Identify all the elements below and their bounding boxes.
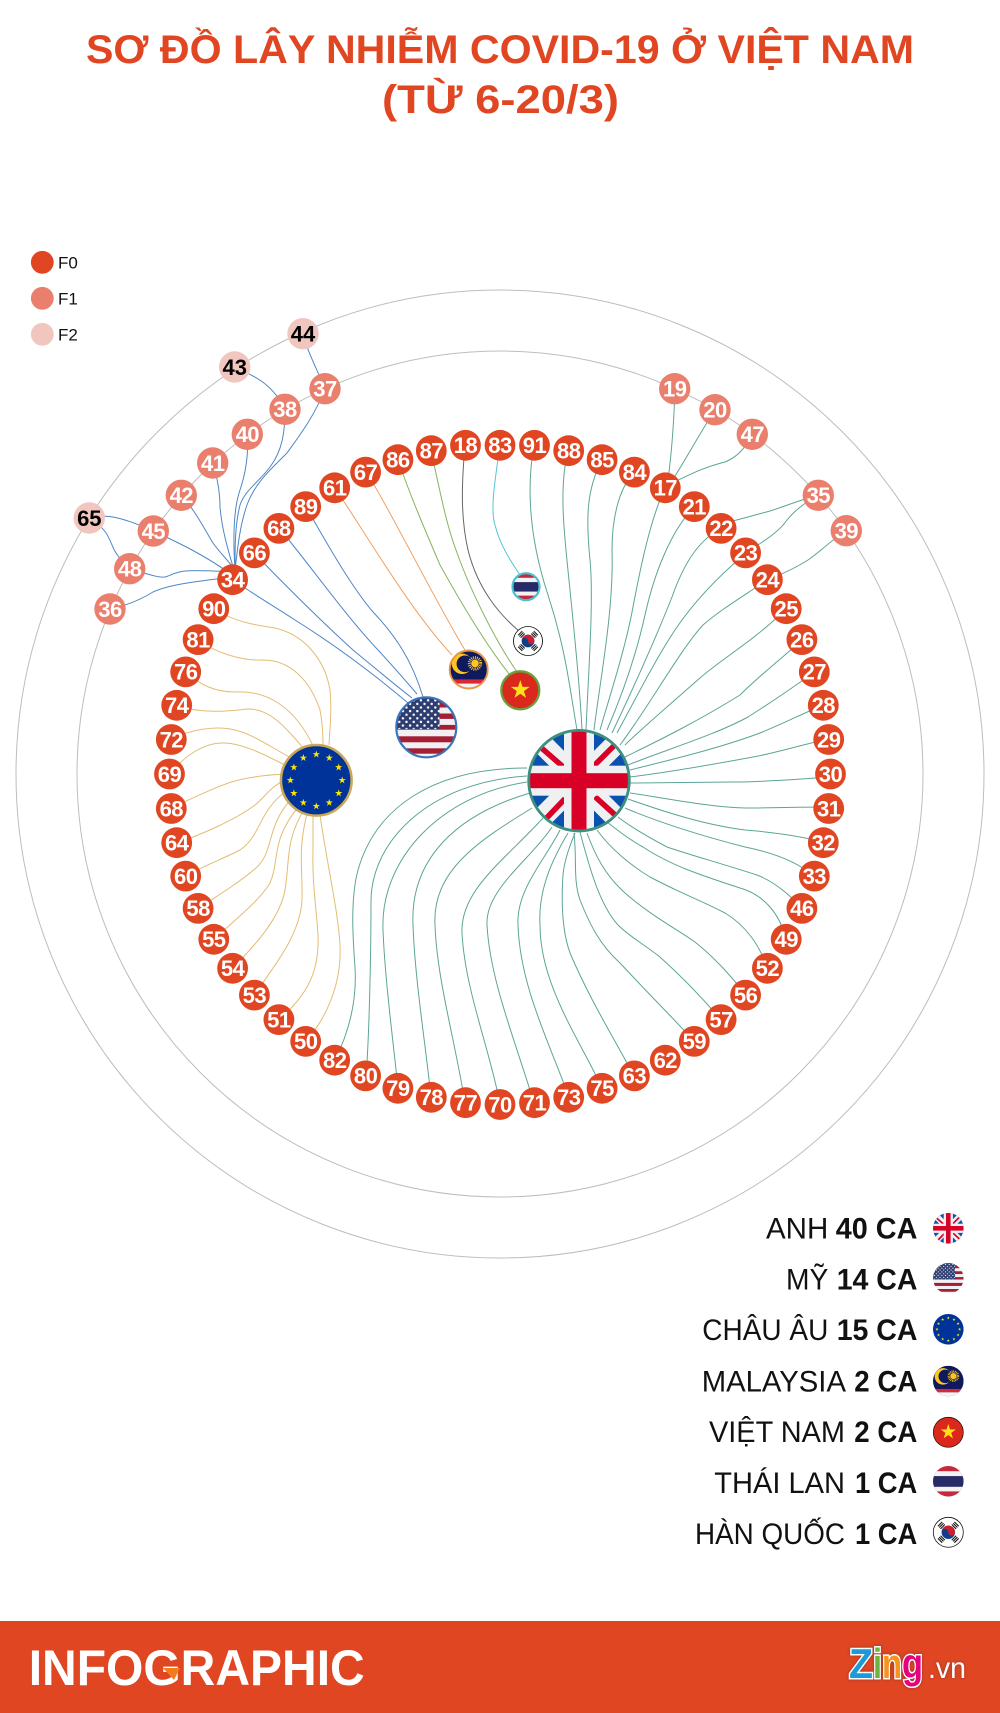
- node 80: 80: [354, 1064, 378, 1089]
- node 53: [239, 980, 270, 1010]
- node 58: [183, 893, 214, 924]
- node 84: 84: [623, 460, 647, 485]
- node 50: 50: [294, 1029, 318, 1054]
- node 83: [485, 430, 515, 461]
- node 83: 83: [488, 433, 512, 458]
- node 66: [239, 538, 270, 568]
- node 57: [706, 1004, 736, 1035]
- node 25: 25: [774, 597, 798, 622]
- node 87: [416, 435, 447, 466]
- node 41: [197, 447, 228, 479]
- node 44: [287, 318, 319, 349]
- node 88: [553, 435, 584, 466]
- node 68 (EU): 68: [160, 796, 183, 821]
- row: Mỹ: 14 CA: [837, 1263, 917, 1296]
- node 73: [553, 1082, 584, 1113]
- row: Việt Nam: [709, 1416, 964, 1449]
- node 63: 63: [623, 1064, 646, 1089]
- node 55: [198, 924, 229, 955]
- node 74: 74: [165, 693, 190, 718]
- hub flag: US: [396, 697, 456, 757]
- row: Anh: [766, 1212, 964, 1245]
- node 35: 35: [807, 483, 830, 508]
- node 88: 88: [557, 439, 581, 464]
- node 60: 60: [174, 864, 198, 889]
- node 18: [450, 430, 481, 461]
- hub flag: Vietnam: [501, 671, 539, 709]
- hub flag: UK: [529, 730, 629, 831]
- hub flag: Malaysia: [450, 650, 488, 688]
- node 45: 45: [142, 519, 165, 544]
- node 62: [650, 1045, 681, 1076]
- node 26: 26: [790, 627, 814, 652]
- links: UK: [335, 389, 846, 1104]
- node 43: [219, 351, 250, 383]
- node 32: 32: [812, 831, 835, 856]
- node 85: 85: [590, 448, 614, 473]
- node 34: 34: [221, 568, 246, 593]
- node 42: 42: [170, 483, 193, 508]
- node 39: 39: [835, 519, 858, 544]
- footer logo: Zing.vn: [849, 1640, 966, 1687]
- node 46: [786, 893, 817, 924]
- row: Châu Âu: CHÂU ÂU: [702, 1314, 828, 1347]
- footer logo: Zing.vn: n: [882, 1640, 902, 1687]
- node 76: [170, 656, 201, 687]
- node 17: 17: [654, 476, 677, 501]
- node 47: 47: [741, 422, 764, 447]
- node 19: [659, 373, 690, 404]
- node 69: [154, 759, 185, 789]
- node 31: 31: [817, 796, 841, 821]
- node 37: [309, 373, 341, 404]
- row: Hàn Quốc: HÀN QUỐC: [695, 1517, 845, 1551]
- row: Hàn Quốc: 1 CA: [855, 1518, 917, 1551]
- node 45: [138, 515, 169, 547]
- node 91: 91: [523, 433, 546, 458]
- node 49: [771, 924, 802, 955]
- hub flag: South Korea: [514, 626, 542, 656]
- node 67: 67: [354, 460, 378, 485]
- node 27: [799, 656, 830, 687]
- node 48: [114, 553, 145, 584]
- links: Vietnam: [398, 451, 517, 675]
- node 50: [290, 1026, 321, 1057]
- node 59: 59: [683, 1029, 706, 1054]
- node 79: 79: [386, 1076, 410, 1101]
- node 36: [94, 593, 126, 625]
- node 30: 30: [819, 762, 842, 787]
- node 20: [699, 394, 731, 425]
- node 39: [831, 515, 862, 546]
- node 44: 44: [291, 322, 316, 347]
- node 70: [485, 1089, 515, 1120]
- node 68 (US): 68: [267, 516, 291, 541]
- node 51: 51: [267, 1007, 291, 1032]
- title: (TỪ 6-20/3): [382, 76, 619, 122]
- node 46: 46: [790, 896, 814, 921]
- node 60: [170, 861, 201, 892]
- row: Anh: ANH: [766, 1212, 828, 1245]
- node 84: [619, 457, 650, 488]
- node 54: [217, 953, 248, 984]
- node 86: [382, 444, 413, 475]
- node 58: 58: [186, 896, 210, 921]
- row: Châu Âu: 15 CA: [837, 1314, 917, 1347]
- node 53: 53: [243, 983, 266, 1008]
- node 23: 23: [734, 541, 758, 566]
- node 57: 57: [709, 1007, 733, 1032]
- link: South Korea: [462, 445, 520, 632]
- footer logo: Zing.vn: .vn: [928, 1652, 966, 1685]
- node 69: 69: [158, 762, 181, 787]
- concentric guide rings: [16, 290, 984, 1258]
- node 24: [752, 564, 783, 595]
- node 22: 22: [709, 516, 733, 541]
- node 81: [183, 624, 214, 655]
- node 38: [269, 394, 301, 425]
- legend item F1: F1: [58, 290, 78, 308]
- node 87: 87: [420, 439, 443, 464]
- node 38: 38: [273, 397, 297, 422]
- country case counts legend: [695, 1212, 964, 1551]
- row: Malaysia: MALAYSIA: [702, 1366, 846, 1399]
- row: Malaysia: 2 CA: [854, 1366, 917, 1399]
- node 61: 61: [323, 476, 347, 501]
- node 29: [813, 724, 844, 755]
- node 80: [350, 1060, 381, 1091]
- node 42: [166, 480, 197, 511]
- legend item F2: F2: [58, 326, 78, 344]
- node 31: [813, 793, 844, 824]
- node 68 (EU): [156, 793, 187, 824]
- node 75: [587, 1073, 618, 1104]
- title: SƠ ĐỒ LÂY NHIỄM COVID-19 Ở VIỆT NAM: [86, 26, 914, 72]
- node 56: [730, 980, 761, 1010]
- node 47: [737, 419, 768, 450]
- node 59: [679, 1026, 710, 1057]
- node 64: [161, 827, 192, 858]
- node 18: 18: [454, 433, 477, 458]
- hub flag: EU: [281, 745, 352, 816]
- node 76: 76: [174, 660, 198, 685]
- footer band: [0, 1621, 1000, 1713]
- node 65: 65: [77, 506, 102, 531]
- node 52: 52: [756, 956, 779, 981]
- node 26: [786, 624, 817, 655]
- node 23: [730, 538, 761, 568]
- footer logo: Zing.vn: g: [902, 1640, 923, 1687]
- row: Mỹ: [786, 1262, 964, 1296]
- F1 case ring: [94, 373, 862, 625]
- legend: case generations: [31, 251, 78, 346]
- node 19: 19: [663, 377, 687, 402]
- node 61: [319, 472, 350, 503]
- links: Malaysia: [335, 472, 465, 655]
- node 41: 41: [201, 451, 225, 476]
- node 81: 81: [186, 627, 210, 652]
- row: Thái Lan: THÁI LAN: [714, 1467, 845, 1500]
- node 82: 82: [323, 1048, 347, 1073]
- links: US: [89, 334, 423, 703]
- node 56: 56: [734, 983, 758, 1008]
- node 63: [619, 1060, 650, 1091]
- node 74: [161, 690, 192, 721]
- node 33: [799, 861, 830, 892]
- node 30: [815, 759, 846, 789]
- node 33: 33: [803, 864, 826, 889]
- legend item F0: F0: [58, 254, 78, 272]
- node 91: [519, 430, 550, 461]
- node 82: [319, 1045, 350, 1076]
- node 34: [217, 564, 248, 595]
- node 77: [450, 1087, 481, 1118]
- node 89: 89: [294, 494, 318, 519]
- node 71: 71: [523, 1090, 546, 1115]
- node 21: 21: [683, 494, 706, 519]
- node 78: 78: [420, 1085, 443, 1110]
- node 28: [808, 690, 839, 721]
- node 54: 54: [221, 956, 246, 981]
- node 43: 43: [222, 355, 247, 380]
- node 22: [706, 513, 736, 544]
- node 40: [232, 419, 263, 450]
- node 29: 29: [817, 727, 841, 752]
- node 25: [771, 593, 802, 624]
- node 55: 55: [202, 927, 226, 952]
- row: Malaysia: [702, 1366, 964, 1399]
- footer brand: INFOGRAPHIC: INFOGRAPHIC: [29, 1640, 365, 1696]
- row: Anh: 40 CA: [836, 1212, 917, 1245]
- F2 case ring: [74, 318, 319, 534]
- node 79: [382, 1073, 413, 1104]
- link: Thailand: [493, 445, 520, 575]
- node 70: 70: [488, 1092, 512, 1117]
- node 66: 66: [243, 541, 266, 566]
- hub flag: Thailand: [512, 573, 540, 600]
- node 28: 28: [812, 693, 835, 718]
- title: [86, 26, 914, 122]
- row: Thái Lan: 1 CA: [855, 1467, 917, 1500]
- row: Việt Nam: 2 CA: [854, 1416, 917, 1449]
- node 64: 64: [165, 831, 190, 856]
- node 67: [350, 457, 381, 488]
- F0 case ring: [154, 430, 846, 1120]
- node 32: [808, 827, 839, 858]
- row: Hàn Quốc: [695, 1517, 964, 1551]
- node 37: 37: [313, 377, 337, 402]
- node 65: [74, 502, 105, 534]
- footer logo: Zing.vn: i: [873, 1640, 882, 1687]
- node 48: 48: [118, 557, 142, 582]
- node 72: [156, 724, 187, 755]
- row: Việt Nam: VIỆT NAM: [709, 1416, 845, 1449]
- node 52: [752, 953, 783, 984]
- node 40: 40: [236, 422, 259, 447]
- node 68 (US): [264, 513, 294, 544]
- node 24: 24: [756, 568, 780, 593]
- node 21: [679, 491, 710, 522]
- node 90: [198, 593, 229, 624]
- node 49: 49: [774, 927, 798, 952]
- row: Châu Âu: [702, 1314, 964, 1347]
- node 89: [290, 491, 321, 522]
- node 71: [519, 1087, 550, 1118]
- node 27: 27: [803, 660, 826, 685]
- node 72: 72: [160, 727, 183, 752]
- node 78: [416, 1082, 447, 1113]
- node 90: 90: [202, 597, 226, 622]
- node 62: 62: [654, 1048, 677, 1073]
- footer logo: Zing.vn: Z: [849, 1640, 873, 1687]
- node 35: [803, 480, 834, 511]
- node 86: 86: [386, 448, 410, 473]
- node 36: 36: [98, 597, 122, 622]
- row: Thái Lan: [714, 1466, 964, 1500]
- node 20: 20: [703, 398, 727, 423]
- row: Mỹ: MỸ: [786, 1262, 828, 1296]
- node 75: 75: [590, 1076, 614, 1101]
- node 17: [650, 472, 681, 503]
- node 85: [587, 444, 618, 475]
- links: EU: [170, 609, 340, 1041]
- node 51: [264, 1004, 294, 1035]
- node 77: 77: [454, 1090, 477, 1115]
- node 73: 73: [557, 1085, 581, 1110]
